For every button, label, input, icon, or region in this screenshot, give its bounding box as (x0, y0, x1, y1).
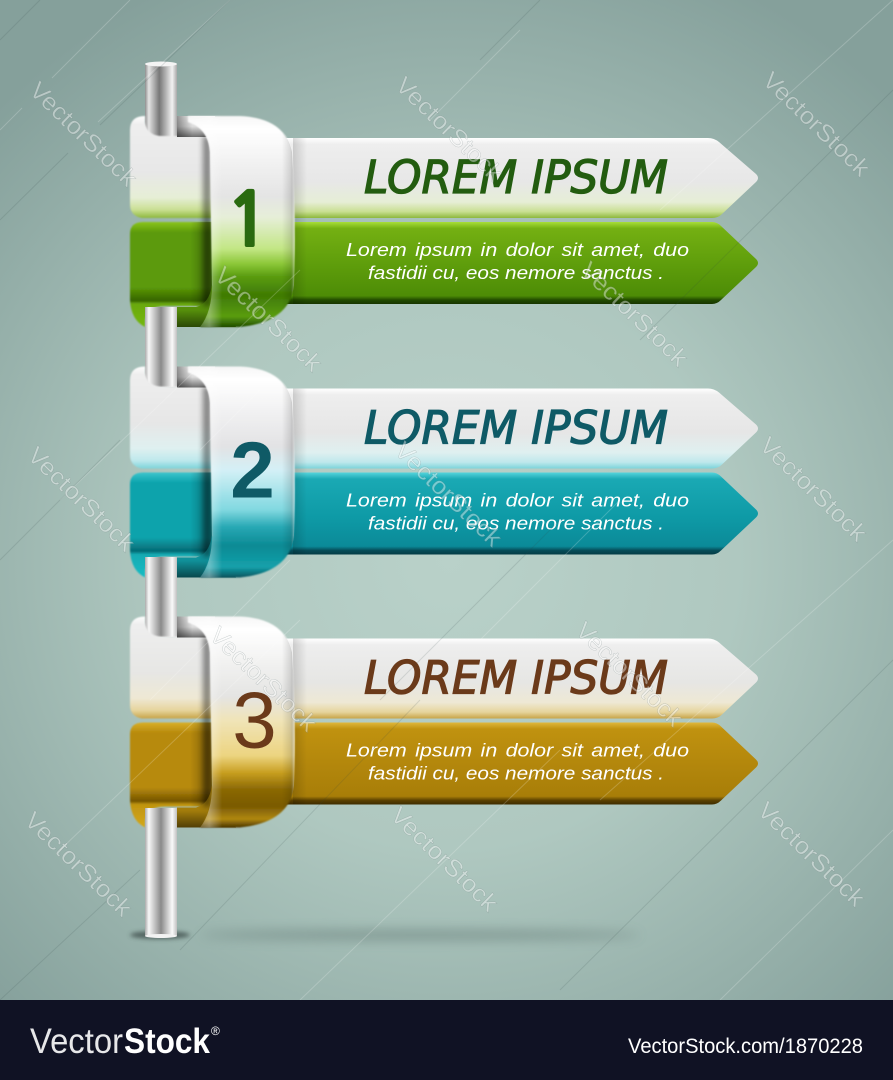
band edge shading 2 (188, 366, 295, 578)
number 2: 2 (230, 426, 275, 514)
VectorStock watermarks: VectorStock (575, 257, 694, 373)
body text 3: Lorem ipsum in dolor sit amet, duo (346, 740, 689, 760)
band tail bottom 2 (177, 536, 236, 578)
fold white 3 (130, 616, 212, 718)
footer logo (30, 1022, 220, 1061)
body text 1 (346, 240, 689, 283)
heading 1: LOREM IPSUM (364, 151, 668, 204)
wrap band 2 (188, 366, 295, 578)
VectorStock watermarks: VectorStock (757, 67, 876, 183)
gold arrow 3 (285, 722, 758, 804)
band edge shading 3 (188, 616, 295, 828)
footer logo: Stock (124, 1022, 210, 1061)
body text 1: fastidii cu, eos nemore sanctus . (368, 263, 664, 283)
band tail top 2 (177, 366, 215, 388)
fold color 1 (130, 222, 212, 327)
banner 3: gold (130, 616, 758, 828)
white arrow 3 (285, 638, 758, 718)
fold shading 1 (190, 222, 212, 306)
banner 1: green (130, 116, 758, 327)
cast shadow of band 3 (203, 636, 211, 806)
body text 3: fastidii cu, eos nemore sanctus . (368, 764, 664, 784)
fold white 2 (130, 366, 212, 468)
VectorStock watermarks: VectorStock (209, 262, 328, 378)
ground shadow (130, 930, 640, 940)
banner 2: teal (130, 366, 758, 578)
VectorStock watermarks: VectorStock (204, 622, 323, 738)
footer logo: Vector (30, 1022, 123, 1061)
fold color 2 (130, 472, 212, 578)
body text 1: Lorem ipsum in dolor sit amet, duo (346, 240, 689, 260)
band tail bottom 3 (177, 786, 236, 828)
heading 3: LOREM IPSUM (364, 652, 668, 704)
VectorStock watermarks: VectorStock (385, 802, 504, 918)
green arrow 1 (285, 222, 758, 304)
pole: metal post top segment (145, 62, 177, 138)
pole: segment between 1 and 2 (145, 307, 177, 387)
white arrow 2 (285, 388, 758, 468)
wrap band 1 (188, 116, 295, 327)
band tail bottom 1 (177, 285, 236, 327)
VectorStock watermarks: VectorStock (570, 617, 689, 733)
VectorStock watermarks (19, 67, 876, 923)
wrap band 3 (188, 616, 295, 828)
body text 2: Lorem ipsum in dolor sit amet, duo (346, 490, 689, 510)
VectorStock watermarks: VectorStock (22, 442, 141, 558)
cast shadow of band 2 (203, 386, 211, 556)
pole: bottom segment (145, 808, 177, 938)
footer logo: ® (211, 1024, 220, 1038)
teal arrow 2 (285, 472, 758, 554)
fold white 1 (130, 116, 212, 218)
VectorStock watermarks: VectorStock (19, 807, 138, 923)
footer bar (0, 1000, 893, 1080)
VectorStock watermarks: VectorStock (390, 72, 509, 188)
fold color 3 (130, 722, 212, 828)
band edge shading 1 (188, 116, 295, 327)
number 1: 1 (226, 185, 270, 258)
number 3: 3 (232, 676, 277, 764)
fold shading 3 (190, 722, 212, 806)
body text 3 (346, 740, 689, 784)
band shadow on arrows 3 (293, 638, 307, 804)
fold shading 2 (190, 472, 212, 556)
band shadow on arrows 2 (293, 388, 307, 554)
VectorStock watermarks: VectorStock (24, 77, 143, 193)
body text 2 (346, 490, 689, 534)
cast shadow of band 1 (203, 136, 211, 306)
VectorStock watermarks: VectorStock (389, 437, 508, 553)
white arrow 1 (285, 138, 758, 218)
VectorStock watermarks: VectorStock (754, 432, 873, 548)
VectorStock watermarks: VectorStock (752, 797, 871, 913)
band tail top 1 (177, 116, 215, 137)
band shadow on arrows 1 (293, 138, 307, 304)
band tail top 3 (177, 616, 215, 638)
footer image id: VectorStock.com/1870228 (628, 1035, 863, 1058)
body text 2: fastidii cu, eos nemore sanctus . (368, 514, 664, 534)
heading 2: LOREM IPSUM (364, 402, 668, 454)
pole: segment between 2 and 3 (145, 557, 177, 637)
